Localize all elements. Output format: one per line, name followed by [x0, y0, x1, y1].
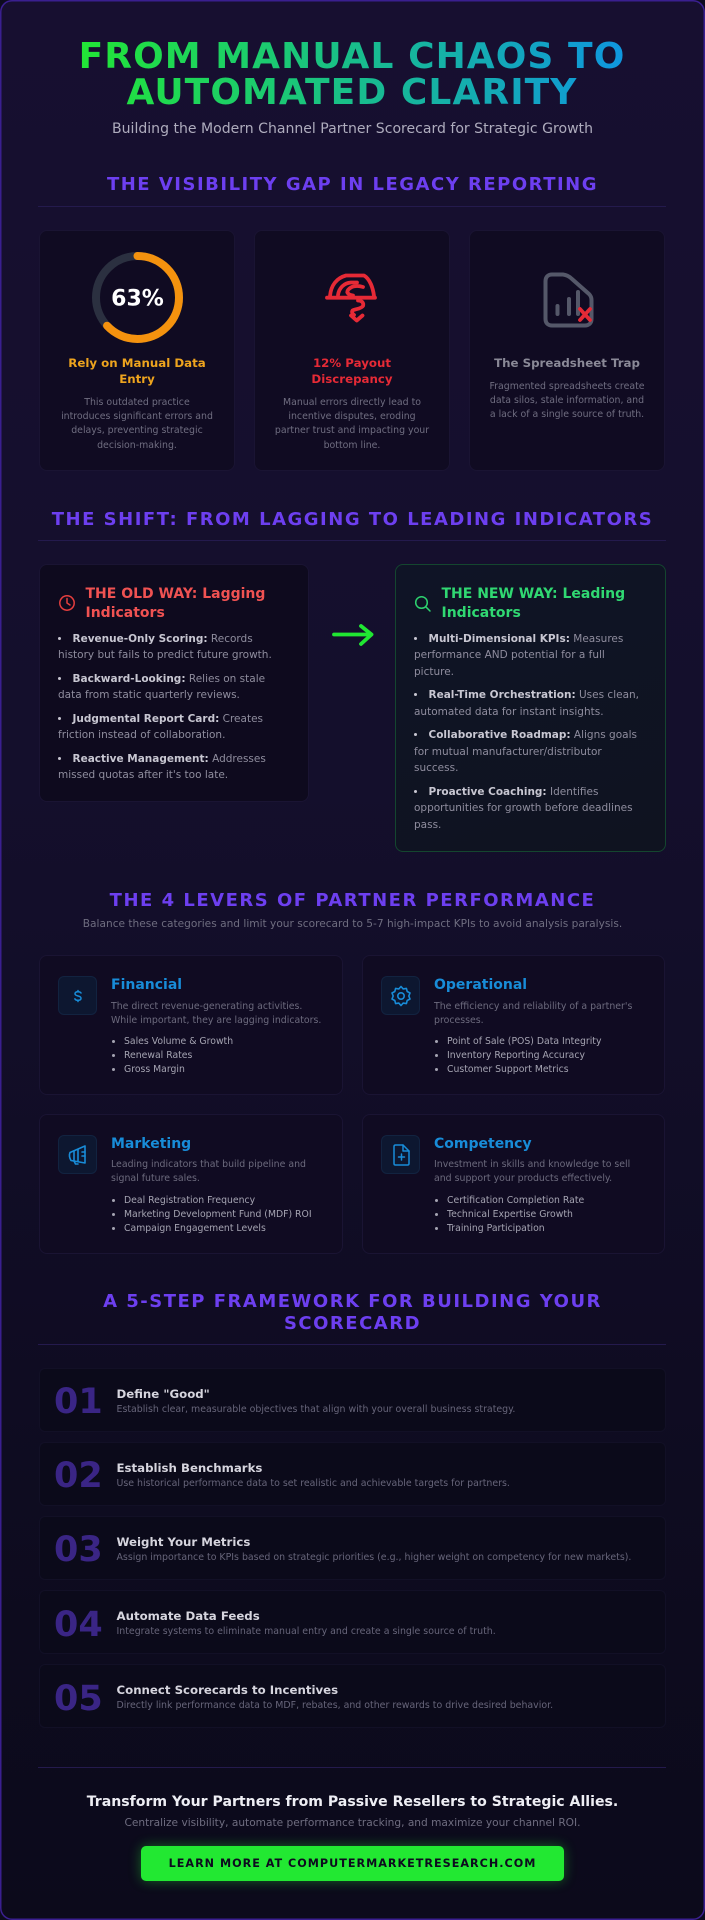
- KPI list: Inventory Reporting Accuracy: [447, 1050, 585, 1061]
- old way list: history but fails to predict future growth.: [58, 649, 272, 661]
- old way list: [58, 633, 272, 781]
- card description: [61, 397, 213, 451]
- panel: the old way: [39, 564, 309, 802]
- icon: payout dome: [325, 274, 377, 322]
- card title: The Spreadsheet Trap: [494, 356, 640, 370]
- old way list: friction instead of collaboration.: [58, 729, 225, 741]
- KPI list: [112, 1036, 233, 1075]
- lever description: signal future sales.: [111, 1173, 200, 1184]
- panel: competency: [362, 1114, 665, 1254]
- step 5: [39, 1664, 666, 1728]
- card description: bottom line.: [324, 440, 380, 451]
- lever description: While important, they are lagging indicators.: [111, 1015, 321, 1026]
- step 5: Directly link performance data to MDF, rebates, and other rewards to drive desired behavior.: [116, 1700, 553, 1711]
- step 2: Use historical performance data to set realistic and achievable targets for partners.: [116, 1478, 510, 1489]
- levers subtitle: Balance these categories and limit your scorecard to 5-7 high-impact KPIs to avoid analysis paralysis.: [83, 918, 622, 930]
- subtitle: Building the Modern Channel Partner Scorecard for Strategic Growth: [112, 121, 593, 137]
- step 4: [39, 1590, 666, 1654]
- panel: manual data entry: [39, 230, 235, 471]
- KPI list: Customer Support Metrics: [447, 1064, 569, 1075]
- donut chart: 63%: [92, 252, 183, 343]
- old way list: missed quotas after it's too late.: [58, 769, 228, 781]
- old way list: data from static quarterly reviews.: [58, 689, 240, 701]
- new way list: Real-Time Orchestration: Uses clean,: [428, 689, 639, 701]
- KPI list: Training Participation: [447, 1223, 545, 1234]
- heading: 4 levers: THE 4 LEVERS OF PARTNER PERFORMANCE: [110, 890, 595, 911]
- title: FROM MANUAL CHAOS TO: [79, 36, 625, 77]
- lever title: Financial: [111, 977, 182, 993]
- card description: Fragmented spreadsheets create: [489, 381, 645, 392]
- icon: broken spreadsheet: [544, 272, 594, 328]
- lever description: The efficiency and reliability of a partner's: [434, 1000, 632, 1012]
- lever title: Marketing: [111, 1136, 191, 1152]
- KPI list: [112, 1195, 312, 1234]
- heading: 5-step framework: [103, 1291, 602, 1334]
- KPI list: Marketing Development Fund (MDF) ROI: [124, 1209, 312, 1220]
- new way list: Proactive Coaching: Identifies: [428, 786, 598, 798]
- step 3: 03: [54, 1530, 103, 1570]
- card title: 12% Payout: [313, 356, 391, 370]
- panel: operational: [362, 955, 665, 1095]
- KPI list: Point of Sale (POS) Data Integrity: [447, 1036, 601, 1047]
- new way list: Multi-Dimensional KPIs: Measures: [428, 633, 623, 645]
- panel: financial: [39, 955, 343, 1095]
- panel: marketing: [39, 1114, 343, 1254]
- step 5: 05: [54, 1679, 103, 1719]
- card title: [311, 356, 393, 386]
- KPI list: [435, 1036, 602, 1075]
- heading: 5-step framework: SCORECARD: [284, 1312, 421, 1334]
- new way list: picture.: [414, 666, 454, 678]
- panel: payout discrepancy: [254, 230, 450, 471]
- step 2: [39, 1442, 666, 1506]
- step 5: Connect Scorecards to Incentives: [116, 1683, 338, 1697]
- card title: Entry: [119, 372, 155, 386]
- new way list: Collaborative Roadmap: Aligns goals: [428, 729, 637, 741]
- old way list: Backward-Looking: Relies on stale: [72, 673, 265, 685]
- card description: introduces significant errors and: [61, 411, 213, 422]
- old way list: Revenue-Only Scoring: Records: [72, 633, 253, 645]
- KPI list: Certification Completion Rate: [447, 1195, 584, 1206]
- card description: [489, 381, 645, 420]
- card title: Rely on Manual Data: [68, 356, 206, 370]
- card title: Discrepancy: [311, 372, 393, 386]
- new way list: for mutual manufacturer/distributor: [414, 746, 602, 758]
- call to action text: Centralize visibility, automate performance tracking, and maximize your channel ROI.: [124, 1817, 581, 1829]
- new way list: performance AND potential for a full: [414, 649, 605, 661]
- KPI list: Renewal Rates: [124, 1050, 192, 1061]
- old way heading: THE OLD WAY: Lagging: [86, 586, 265, 602]
- card description: data silos, stale information, and: [490, 395, 644, 406]
- old way heading: [86, 586, 265, 620]
- KPI list: Sales Volume & Growth: [124, 1036, 233, 1047]
- new way heading: Indicators: [442, 604, 521, 620]
- card description: This outdated practice: [84, 397, 190, 408]
- lever description: The direct revenue-generating activities.: [111, 1000, 302, 1012]
- step 4: Automate Data Feeds: [116, 1609, 260, 1623]
- new way heading: THE NEW WAY: Leading: [442, 586, 625, 602]
- lever description: [434, 1159, 630, 1184]
- old way heading: Indicators: [86, 604, 165, 620]
- donut chart: 63%: 63%: [111, 286, 164, 312]
- new way list: success.: [414, 762, 458, 774]
- step 4: Integrate systems to eliminate manual entry and create a single source of truth.: [116, 1626, 496, 1637]
- step 1: [39, 1368, 666, 1432]
- card title: [68, 356, 206, 386]
- new way list: automated data for instant insights.: [414, 706, 604, 718]
- icon: magnifier: [414, 596, 431, 612]
- heading: the shift: THE SHIFT: FROM LAGGING TO LEADING INDICATORS: [52, 509, 653, 530]
- step 1: Establish clear, measurable objectives that align with your overall business strategy.: [116, 1404, 515, 1414]
- title: AUTOMATED CLARITY: [127, 72, 577, 112]
- KPI list: Campaign Engagement Levels: [124, 1223, 266, 1234]
- panel: spreadsheet trap: [469, 230, 665, 471]
- card description: a lack of a single source of truth.: [490, 409, 644, 420]
- card description: partner trust and impacting your: [275, 425, 429, 436]
- call to action heading: Transform Your Partners from Passive Resellers to Strategic Allies.: [87, 1794, 618, 1810]
- KPI list: Deal Registration Frequency: [124, 1195, 255, 1206]
- step 2: 02: [54, 1456, 103, 1496]
- icon: megaphone: [58, 1134, 97, 1174]
- step 1: 01: [54, 1382, 103, 1422]
- panel: the new way: [395, 564, 666, 852]
- new way list: opportunities for growth before deadlines: [414, 802, 633, 814]
- lever description: processes.: [434, 1015, 484, 1026]
- new way list: pass.: [414, 819, 441, 831]
- KPI list: [435, 1195, 584, 1234]
- step 1: Define "Good": [116, 1386, 210, 1400]
- lever description: [111, 1000, 321, 1026]
- lever description: Investment in skills and knowledge to sell: [434, 1159, 630, 1170]
- step 4: 04: [54, 1605, 103, 1645]
- icon: dollar: [58, 976, 97, 1014]
- KPI list: Gross Margin: [124, 1064, 185, 1075]
- step 3: Assign importance to KPIs based on strategic priorities (e.g., higher weight on competency for new markets).: [116, 1552, 631, 1563]
- heading: 5-step framework: A 5-STEP FRAMEWORK FOR BUILDING YOUR: [103, 1291, 602, 1312]
- lever description: [111, 1159, 306, 1184]
- new way heading: [442, 586, 625, 620]
- card description: [275, 397, 430, 451]
- button: learn more: LEARN MORE AT COMPUTERMARKETRESEARCH.COM: [169, 1857, 536, 1870]
- lever title: Competency: [434, 1136, 532, 1152]
- lever description: [434, 1000, 632, 1026]
- icon: file plus: [381, 1134, 420, 1174]
- step 3: [39, 1516, 666, 1580]
- title: [78, 39, 626, 110]
- KPI list: Technical Expertise Growth: [447, 1209, 573, 1220]
- icon: gear: [381, 976, 420, 1014]
- heading: visibility gap: THE VISIBILITY GAP IN LEGACY REPORTING: [107, 174, 598, 195]
- old way list: Reactive Management: Addresses: [72, 753, 266, 765]
- old way list: Judgmental Report Card: Creates: [72, 713, 263, 725]
- lever title: Operational: [434, 977, 527, 993]
- lever description: and support your products effectively.: [434, 1173, 612, 1184]
- card description: Manual errors directly lead to: [283, 397, 421, 408]
- arrow: old to new: [332, 624, 374, 646]
- step 2: Establish Benchmarks: [116, 1461, 262, 1475]
- card description: incentive disputes, eroding: [288, 411, 416, 422]
- icon: clock: [59, 595, 75, 611]
- step 3: Weight Your Metrics: [116, 1535, 250, 1549]
- new way list: [414, 633, 639, 831]
- lever description: Leading indicators that build pipeline and: [111, 1159, 306, 1170]
- card description: decision-making.: [97, 440, 177, 451]
- button: learn more: [141, 1846, 564, 1881]
- card description: delays, preventing strategic: [71, 425, 203, 436]
